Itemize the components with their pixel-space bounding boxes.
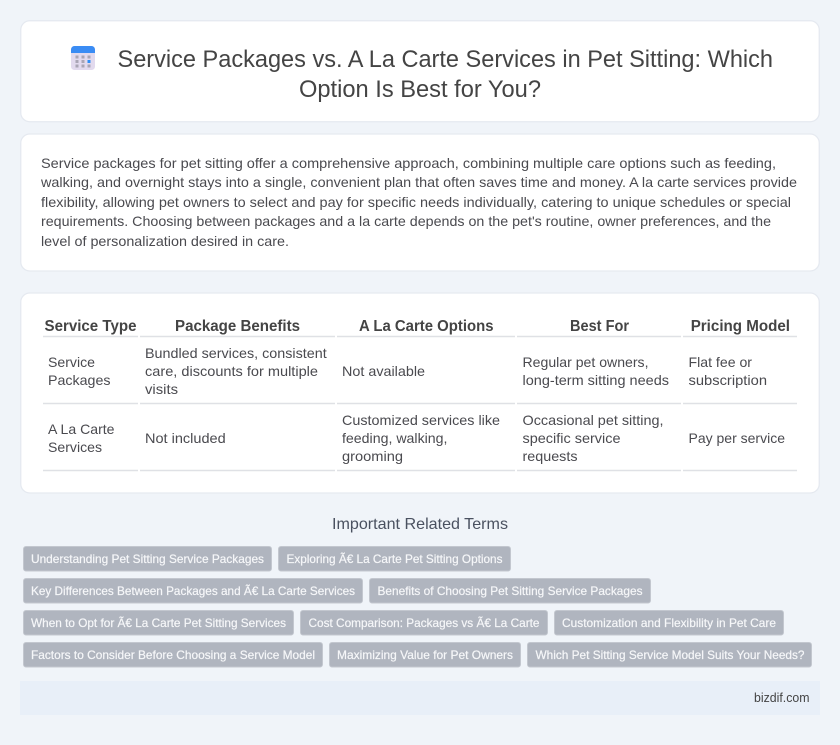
intro paragraph: requirements. Choosing between packages and a la carte depends on the pet's routine, owner preferences, and the [41, 213, 771, 229]
table row: service packages: Regular pet owners, [522, 354, 648, 370]
tag: Which Pet Sitting Service Model Suits Your Needs? [536, 648, 805, 662]
intro paragraph: Service packages for pet sitting offer a comprehensive approach, combining multiple care options such as feeding, [41, 155, 776, 171]
table row: service packages: Bundled services, consistent [145, 345, 327, 361]
intro text panel [21, 134, 819, 271]
title: Option Is Best for You? [299, 76, 541, 103]
tag [24, 642, 322, 667]
tag: When to Opt for Ã€ La Carte Pet Sitting Services [31, 616, 286, 630]
table row: a la carte services: Services [48, 439, 102, 455]
tag [278, 546, 510, 571]
tag [554, 610, 784, 635]
tag [24, 610, 294, 635]
intro paragraph: walking, and overnight stays into a single, convenient plan that often saves time and money. A la carte services provide [40, 174, 797, 190]
table header row: Package Benefits [175, 318, 300, 335]
table row: a la carte services: Occasional pet sitting, [522, 412, 664, 428]
table row: service packages: care, discounts for multiple [145, 363, 318, 379]
table header row: A La Carte Options [359, 318, 494, 335]
tag [330, 642, 520, 667]
title [118, 46, 773, 103]
tag: Understanding Pet Sitting Service Packages [31, 552, 264, 566]
table row: a la carte services: Pay per service [688, 430, 785, 446]
tag: Key Differences Between Packages and Ã€ La Carte Services [31, 584, 355, 598]
tag [370, 578, 650, 603]
table header row [44, 318, 790, 335]
header card [21, 21, 819, 122]
tag: Maximizing Value for Pet Owners [337, 648, 513, 662]
intro paragraph: flexibility, allowing pet owners to select and pay for specific needs individually, catering to unique schedules or special [41, 194, 791, 210]
footer source text: bizdif.com [754, 691, 810, 705]
table row: a la carte services [48, 412, 785, 464]
table row: service packages: Packages [48, 372, 110, 388]
intro paragraph [40, 155, 797, 249]
intro paragraph: level of personalization desired in care. [41, 233, 289, 249]
footer bar [20, 681, 820, 715]
tag: Benefits of Choosing Pet Sitting Service Packages [378, 584, 642, 598]
tag: Exploring Ã€ La Carte Pet Sitting Options [286, 552, 502, 566]
related terms tags [24, 546, 812, 667]
table row: service packages: Flat fee or [688, 354, 752, 370]
tag: Factors to Consider Before Choosing a Service Model [31, 648, 315, 662]
table row: a la carte services: requests [522, 448, 578, 464]
table header row: Pricing Model [691, 318, 790, 335]
table row: a la carte services: specific service [522, 430, 621, 446]
tag: Customization and Flexibility in Pet Care [562, 616, 776, 630]
tag [528, 642, 812, 667]
table row: a la carte services: grooming [342, 448, 403, 464]
table row: a la carte services: Customized services like [342, 412, 500, 428]
table row: service packages: long-term sitting needs [522, 372, 669, 388]
table row: service packages: subscription [688, 372, 767, 388]
table row: service packages: visits [145, 381, 178, 397]
table row: service packages [48, 345, 767, 397]
icon: calendar [71, 46, 95, 70]
tag [300, 610, 548, 635]
table header row: Best For [570, 318, 629, 335]
table row: a la carte services: Not included [145, 430, 226, 446]
tag: Cost Comparison: Packages vs Ã€ La Carte [308, 616, 540, 630]
table row: service packages: Not available [342, 363, 425, 379]
table row: a la carte services: A La Carte [48, 421, 115, 437]
related terms heading: Important Related Terms [332, 516, 508, 533]
tag [24, 578, 362, 603]
title: Service Packages vs. A La Carte Services in Pet Sitting: Which [118, 46, 773, 73]
comparison table panel [21, 293, 819, 493]
table row: a la carte services: feeding, walking, [342, 430, 448, 446]
table row: service packages: Service [48, 354, 95, 370]
tag [24, 546, 272, 571]
table header row: Service Type [44, 318, 137, 335]
